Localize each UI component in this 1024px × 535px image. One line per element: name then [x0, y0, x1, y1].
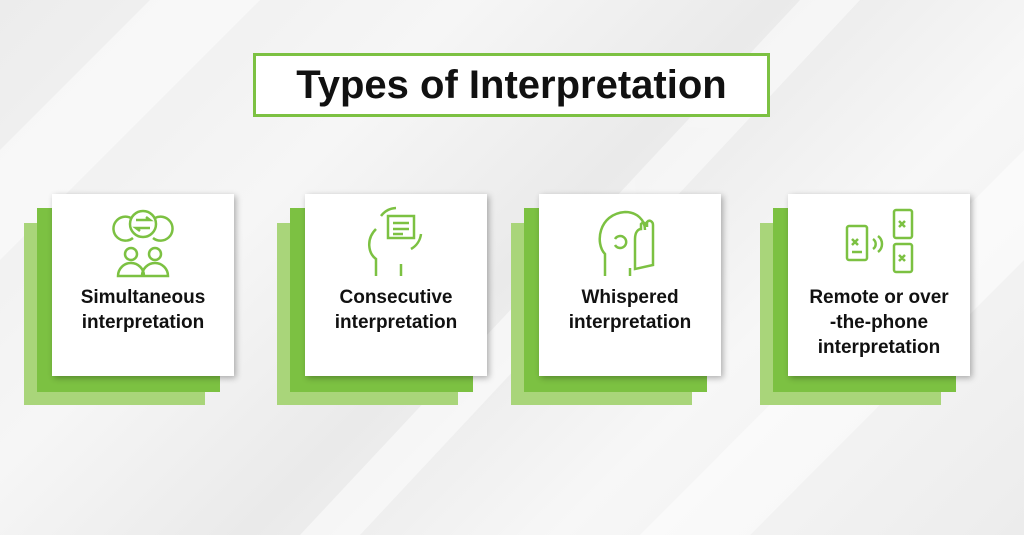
text: [569, 287, 691, 333]
icon: phones: [846, 208, 914, 274]
text: Remote or over: [809, 287, 949, 308]
text: Consecutive: [340, 287, 452, 308]
text: -the-phone: [830, 312, 928, 333]
icon: head with document: [368, 206, 422, 276]
title: Types of Interpretation: [296, 63, 727, 107]
title: [253, 53, 770, 117]
icon: people talking: [112, 210, 174, 278]
text: [809, 287, 949, 358]
panel: consecutive: [277, 192, 493, 405]
text: interpretation: [569, 312, 691, 333]
text: [335, 287, 457, 333]
text: interpretation: [335, 312, 457, 333]
text: Whispered: [581, 287, 679, 308]
text: interpretation: [82, 312, 204, 333]
text: Simultaneous: [81, 287, 205, 308]
text: [81, 287, 205, 333]
panel: simultaneous: [24, 192, 240, 405]
icon: head with hand: [598, 210, 654, 276]
text: interpretation: [818, 337, 940, 358]
panel: whispered: [511, 192, 727, 405]
panel: remote: [760, 192, 976, 405]
